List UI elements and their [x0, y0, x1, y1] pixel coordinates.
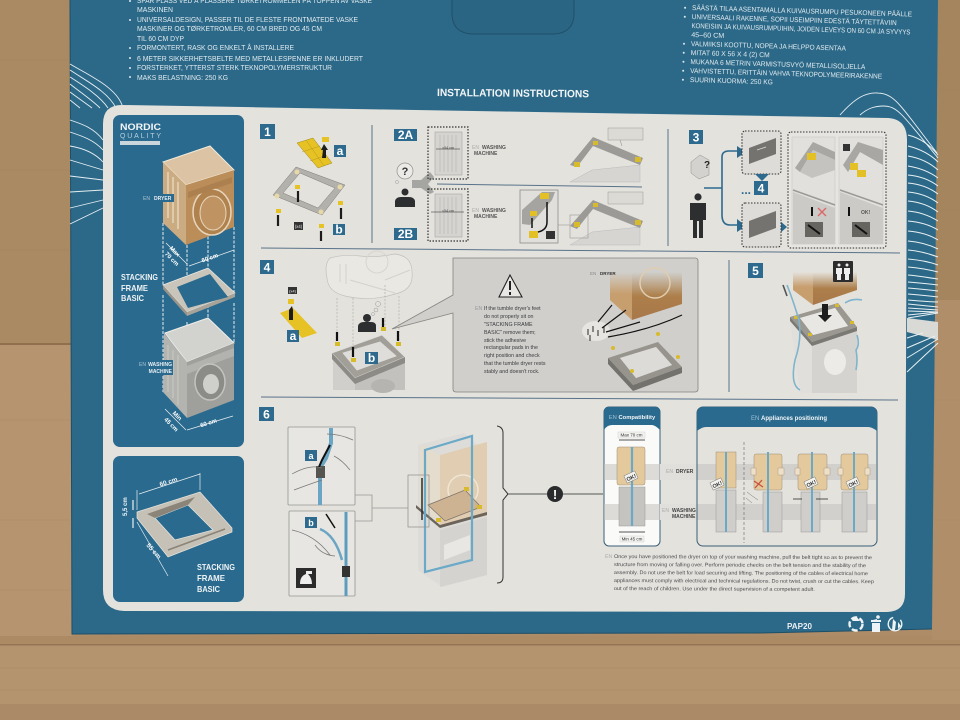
dimension: max 70 cm: [163, 243, 187, 268]
safety text paragraph: [605, 554, 874, 593]
icon: warning triangle: [499, 275, 522, 297]
icon: sorting symbol: [888, 617, 902, 631]
label: washing machine: WASHING: [148, 362, 172, 368]
label: dryer row: EN: [666, 469, 673, 475]
warning text: "STACKING FRAME: [484, 322, 533, 328]
continue to step 4: 4: [758, 182, 765, 196]
product text Norwegian: FORMONTERT, RASK OG ENKELT Å INSTALLERE: [137, 43, 294, 52]
decorative wave lines: [70, 64, 938, 224]
icon: tidy man bin: [871, 615, 881, 632]
dimension: 60 cm washer: [187, 416, 233, 430]
label b: b: [368, 351, 375, 365]
machine with frame: [332, 318, 405, 393]
dimension: 60 cm: [137, 473, 200, 510]
dashed guide lines: [163, 223, 234, 392]
product text Finnish: MUKANA 6 METRIN VARMISTUSVYÖ METALLISOLJELLA: [690, 58, 866, 71]
step 3: [689, 130, 886, 248]
footer code: PAP20: [787, 622, 813, 631]
max and min widths: [618, 432, 645, 542]
question bubble: [396, 163, 413, 184]
inset b: pulling belt: b: [308, 518, 314, 528]
machine with frame: [790, 303, 857, 393]
dimension: 5.5 cm: 5,5 cm: [123, 497, 129, 516]
quantity x4: [288, 287, 297, 294]
quantity x4: (x4): [295, 224, 303, 229]
label: washing machine row: MACHINE: [672, 514, 696, 520]
label: dryer row: DRYER: [676, 469, 694, 475]
step 4: [260, 251, 698, 393]
product text Norwegian: MAKS BELASTNING: 250 KG: [137, 75, 228, 82]
label: washing machine: MACHINE: [149, 369, 173, 375]
frame on machine 2A: [570, 128, 643, 182]
label: stacking frame basic: STACKING: [197, 562, 235, 572]
safety text paragraph: structure from moving or falling over. Perform periodic checks on the belt tension and the stability of the: [614, 562, 866, 569]
quantity x4: (x4): [289, 288, 297, 294]
bracket: [497, 426, 508, 583]
warning text: rectangular pads in the: [484, 345, 538, 351]
product text Finnish: UNIVERSAALI RAKENNE, SOPII USEIMPIIN EDESTÄ TÄYTETTÄVIIN: [692, 13, 897, 27]
panel: appliances positioning: EN Appliances positioning: [751, 416, 827, 422]
panel: frame dimensions: [113, 456, 244, 602]
label: stacking frame basic: STACKING: [121, 272, 158, 282]
product text Finnish: KONEISIIN JA KUIVAUSRUMPUIHIN, JOIDEN LEVEYS ON 60 CM JA SYVYYS: [691, 23, 911, 36]
panel: compatibility: [604, 407, 876, 546]
down arrow: [818, 304, 832, 322]
icon: recycling: [850, 616, 862, 630]
logo: Nordic Quality: NORDIC: [120, 122, 161, 133]
label: washing machine 2B: EN: [472, 208, 479, 214]
panel: appliances positioning: [697, 407, 877, 546]
label: dryer: DRYER: [600, 271, 616, 276]
unit 1 side view: OK!: [712, 480, 724, 490]
dryer lowered: [793, 272, 857, 305]
feet check panel: OK!: [861, 210, 870, 216]
label: washing machine 2B: MACHINE: [474, 214, 498, 220]
dimension: 60 cm: 60 cm: [159, 476, 179, 489]
thought cloud with dryer feet: [326, 251, 412, 316]
connector to stack: [355, 495, 408, 521]
compatibility stack: [617, 447, 645, 526]
icon: two people: [833, 261, 853, 282]
warning text: right position and check: [484, 353, 540, 359]
step badge 3: 3: [693, 130, 700, 144]
label: stacking frame basic: [197, 562, 235, 594]
warning text: EN: [475, 306, 483, 312]
step badge 4: [260, 260, 274, 274]
safety text paragraph: EN: [605, 554, 612, 560]
dimension: min 45 cm: 45 cm: [162, 417, 179, 433]
label: stacking frame basic: [121, 272, 158, 303]
step badge 5: 5: [752, 264, 759, 278]
inset a: tightening belt: [288, 427, 355, 505]
step badge 3: [689, 130, 703, 144]
dimension: 55 cm: 55 cm: [144, 542, 162, 561]
label: dryer: [590, 271, 616, 276]
warning text: stably and doesn't rock.: [484, 369, 539, 375]
label b: [365, 351, 378, 365]
dryer panel option bottom: [742, 203, 781, 247]
compatibility stack: OK!: [626, 473, 638, 483]
dimension: min 45 cm: Min: [171, 411, 183, 423]
blue cardboard box: [70, 0, 938, 634]
step badge 2B: [394, 227, 417, 241]
label: stacking frame basic: BASIC: [121, 293, 144, 303]
product text Norwegian: FORSTERKET, YTTERST STERK TEKNOPOLYMERSTRUKTUR: [137, 65, 332, 72]
blue cables: [783, 285, 862, 390]
step 2: [394, 127, 643, 245]
logo: Nordic Quality: [120, 122, 161, 145]
strapped stack: [408, 433, 487, 587]
product text Finnish: MITAT 60 X 56 X 4 (2) CM: [691, 50, 770, 59]
label: washing machine 2B: [472, 208, 506, 220]
label: washing machine 2A: EN: [472, 145, 479, 151]
icon: person: [395, 188, 415, 207]
label: stacking frame basic: FRAME: [121, 283, 148, 293]
frame on machine 2B: [558, 192, 643, 245]
exclamation icon with lines: !: [553, 487, 557, 502]
label: washing machine 2B: WASHING: [482, 208, 506, 214]
label: washing machine row: EN: [662, 508, 669, 514]
safety text paragraph: Once you have positioned the dryer on top of your washing machine, pull the belt tight so as to prevent the: [614, 554, 872, 561]
warning text: stick the adhesive: [484, 338, 526, 344]
product text Finnish: 45–60 CM: [691, 32, 725, 40]
safety text paragraph: appliances must comply with electrical and technical regulations. Do not twist, crush or cut the cables. Keep: [614, 578, 874, 585]
logo: Nordic Quality: QUALITY: [120, 133, 161, 140]
machine option 2B: [428, 189, 468, 241]
heading: installation instructions: INSTALLATION INSTRUCTIONS: [437, 87, 589, 100]
warning text: do not properly sit on: [484, 314, 534, 320]
product text Finnish: SÄÄSTÄ TILAA ASENTAMALLA KUIVAUSRUMPU PESUKONEEN PÄÄLLE: [692, 4, 912, 19]
stacking frame illustration: [163, 268, 235, 316]
label: dryer: [143, 194, 174, 202]
label a: a: [337, 144, 344, 158]
safety text paragraph: out of the reach of children. Use under the direct supervision of a competent adult.: [614, 586, 815, 593]
handle notch: [452, 0, 574, 34]
product text Finnish: VAHVISTETTU, ERITTÄIN VAHVA TEKNOPOLYMEERIRAKENNE: [690, 67, 883, 81]
dimension: 60 cm dryer: 60 cm: [201, 253, 219, 264]
dimension: 55 cm: [137, 522, 168, 576]
unit 4 ok: OK!: [848, 479, 860, 489]
label: washing machine: [139, 360, 173, 375]
icon: person: [358, 314, 376, 332]
product text Norwegian: [129, 0, 372, 82]
product text Norwegian: UNIVERSALDESIGN, PASSER TIL DE FLESTE FRONTMATEDE VASKE: [137, 17, 358, 24]
step badge 2A: [394, 128, 417, 142]
step badge 6: 6: [263, 408, 270, 422]
machine option 2A: [428, 127, 468, 179]
max and min widths: Min 45 cm: [622, 537, 643, 542]
white instruction panel: [103, 105, 907, 612]
callout panel: warning: [392, 258, 698, 392]
safety text paragraph: assembly. Do not use the belt for load securing and lifting. The positioning of the cables of electrical home: [614, 570, 868, 577]
label: washing machine 2A: WASHING: [482, 145, 506, 151]
label: dryer: EN: [143, 196, 150, 202]
right side dense wave stripes: [907, 135, 938, 372]
inset a: tightening belt: a: [308, 451, 314, 461]
unit 3 ok centred: [793, 452, 830, 532]
step 1: [260, 124, 346, 241]
label: stacking frame basic: BASIC: [197, 584, 220, 594]
feet check panel: [788, 132, 886, 248]
dimension: min 45 cm: [162, 409, 186, 433]
flow arrows: [704, 146, 841, 234]
label b: b: [335, 222, 343, 236]
label a: [287, 329, 299, 343]
product text Norwegian: MASKINEN: [137, 7, 173, 14]
continue to step 4: [741, 174, 769, 197]
washing machine illustration: [163, 318, 234, 418]
panel: compatibility: EN Compatibility: [609, 415, 656, 421]
product text Norwegian: TIL 60 CM DYP: [137, 36, 184, 43]
product text Norwegian: 6 METER SIKKERHETSBELTE MED METALLESPENNE ER INKLUDERT: [137, 56, 364, 63]
label: washing machine: EN: [139, 362, 146, 368]
machine option 2A: >54 cm: [442, 146, 454, 150]
label: washing machine row: [660, 504, 697, 520]
exclamation icon with lines: [508, 486, 603, 502]
warning text: that the tumble dryer rests: [484, 361, 546, 367]
product text Norwegian: MASKINER OG TØRKETROMLER, 60 CM BRED OG 45 CM: [137, 26, 322, 33]
label: dryer row: [660, 464, 697, 480]
label: stacking frame basic: FRAME: [197, 573, 225, 583]
unit 4 ok: [838, 452, 870, 532]
panel: stacked appliances overview: [113, 115, 244, 447]
inset b: pulling belt: [289, 511, 355, 596]
dimension: max 70 cm: 70 cm: [163, 251, 179, 268]
product text Finnish: VALMIIKSI KOOTTU, NOPEA JA HELPPO ASENTAA: [691, 41, 846, 53]
yellow pad sheet: [280, 299, 317, 338]
dimension: 5.5 cm: [123, 497, 133, 528]
step badge 2A: 2A: [398, 128, 414, 142]
dryer bottom with feet: [582, 268, 682, 341]
warning text: If the tumble dryer's feet: [484, 306, 541, 312]
yellow adhesive pad sheet: [297, 137, 332, 168]
machine option 2B: <54 cm: [442, 209, 454, 213]
warning text: BASIC" remove them;: [484, 330, 536, 336]
product text Finnish: SUURIN KUORMA: 250 KG: [690, 77, 773, 86]
question bubble: ?: [402, 166, 409, 178]
label: dryer: EN: [590, 271, 596, 276]
step 5: [748, 261, 862, 393]
frame with pads: [273, 167, 345, 241]
unit 2 not ok: [746, 452, 784, 532]
step badge 6: [259, 407, 274, 422]
frame with pads: [608, 332, 682, 391]
label: washing machine 2A: MACHINE: [474, 151, 498, 157]
thought bubble with dryer: [691, 155, 710, 179]
inset: pad detail: [520, 190, 558, 243]
product text Finnish: [682, 4, 912, 91]
thought bubble with dryer: ?: [704, 160, 710, 171]
connector: [412, 172, 434, 194]
unit 3 ok centred: OK!: [806, 479, 818, 489]
max and min widths: Max 70 cm: [620, 433, 643, 438]
dimension: 60 cm dryer: [189, 250, 234, 266]
frame illustration: [137, 492, 232, 557]
step 6: [259, 407, 902, 632]
step badge 2B: 2B: [398, 227, 414, 241]
continue to step 4: ...: [741, 183, 751, 197]
dimension: max 70 cm: Max: [168, 246, 181, 259]
unit 1 side view: [710, 452, 736, 532]
gray band washer: [604, 504, 876, 520]
warning text: [475, 306, 546, 375]
label a: a: [290, 329, 297, 343]
label: washing machine 2A: [472, 145, 506, 157]
dryer panel option top: [742, 131, 781, 174]
gray band dryer: [604, 464, 876, 480]
icon: person standing: [690, 193, 706, 238]
dimension: 60 cm washer: 60 cm: [200, 418, 218, 429]
step badge 4: 4: [264, 260, 271, 274]
label: washing machine row: WASHING: [672, 508, 696, 514]
label: dryer: DRYER: [154, 196, 172, 202]
dryer illustration: [163, 146, 234, 245]
step badge 1: 1: [264, 125, 271, 139]
